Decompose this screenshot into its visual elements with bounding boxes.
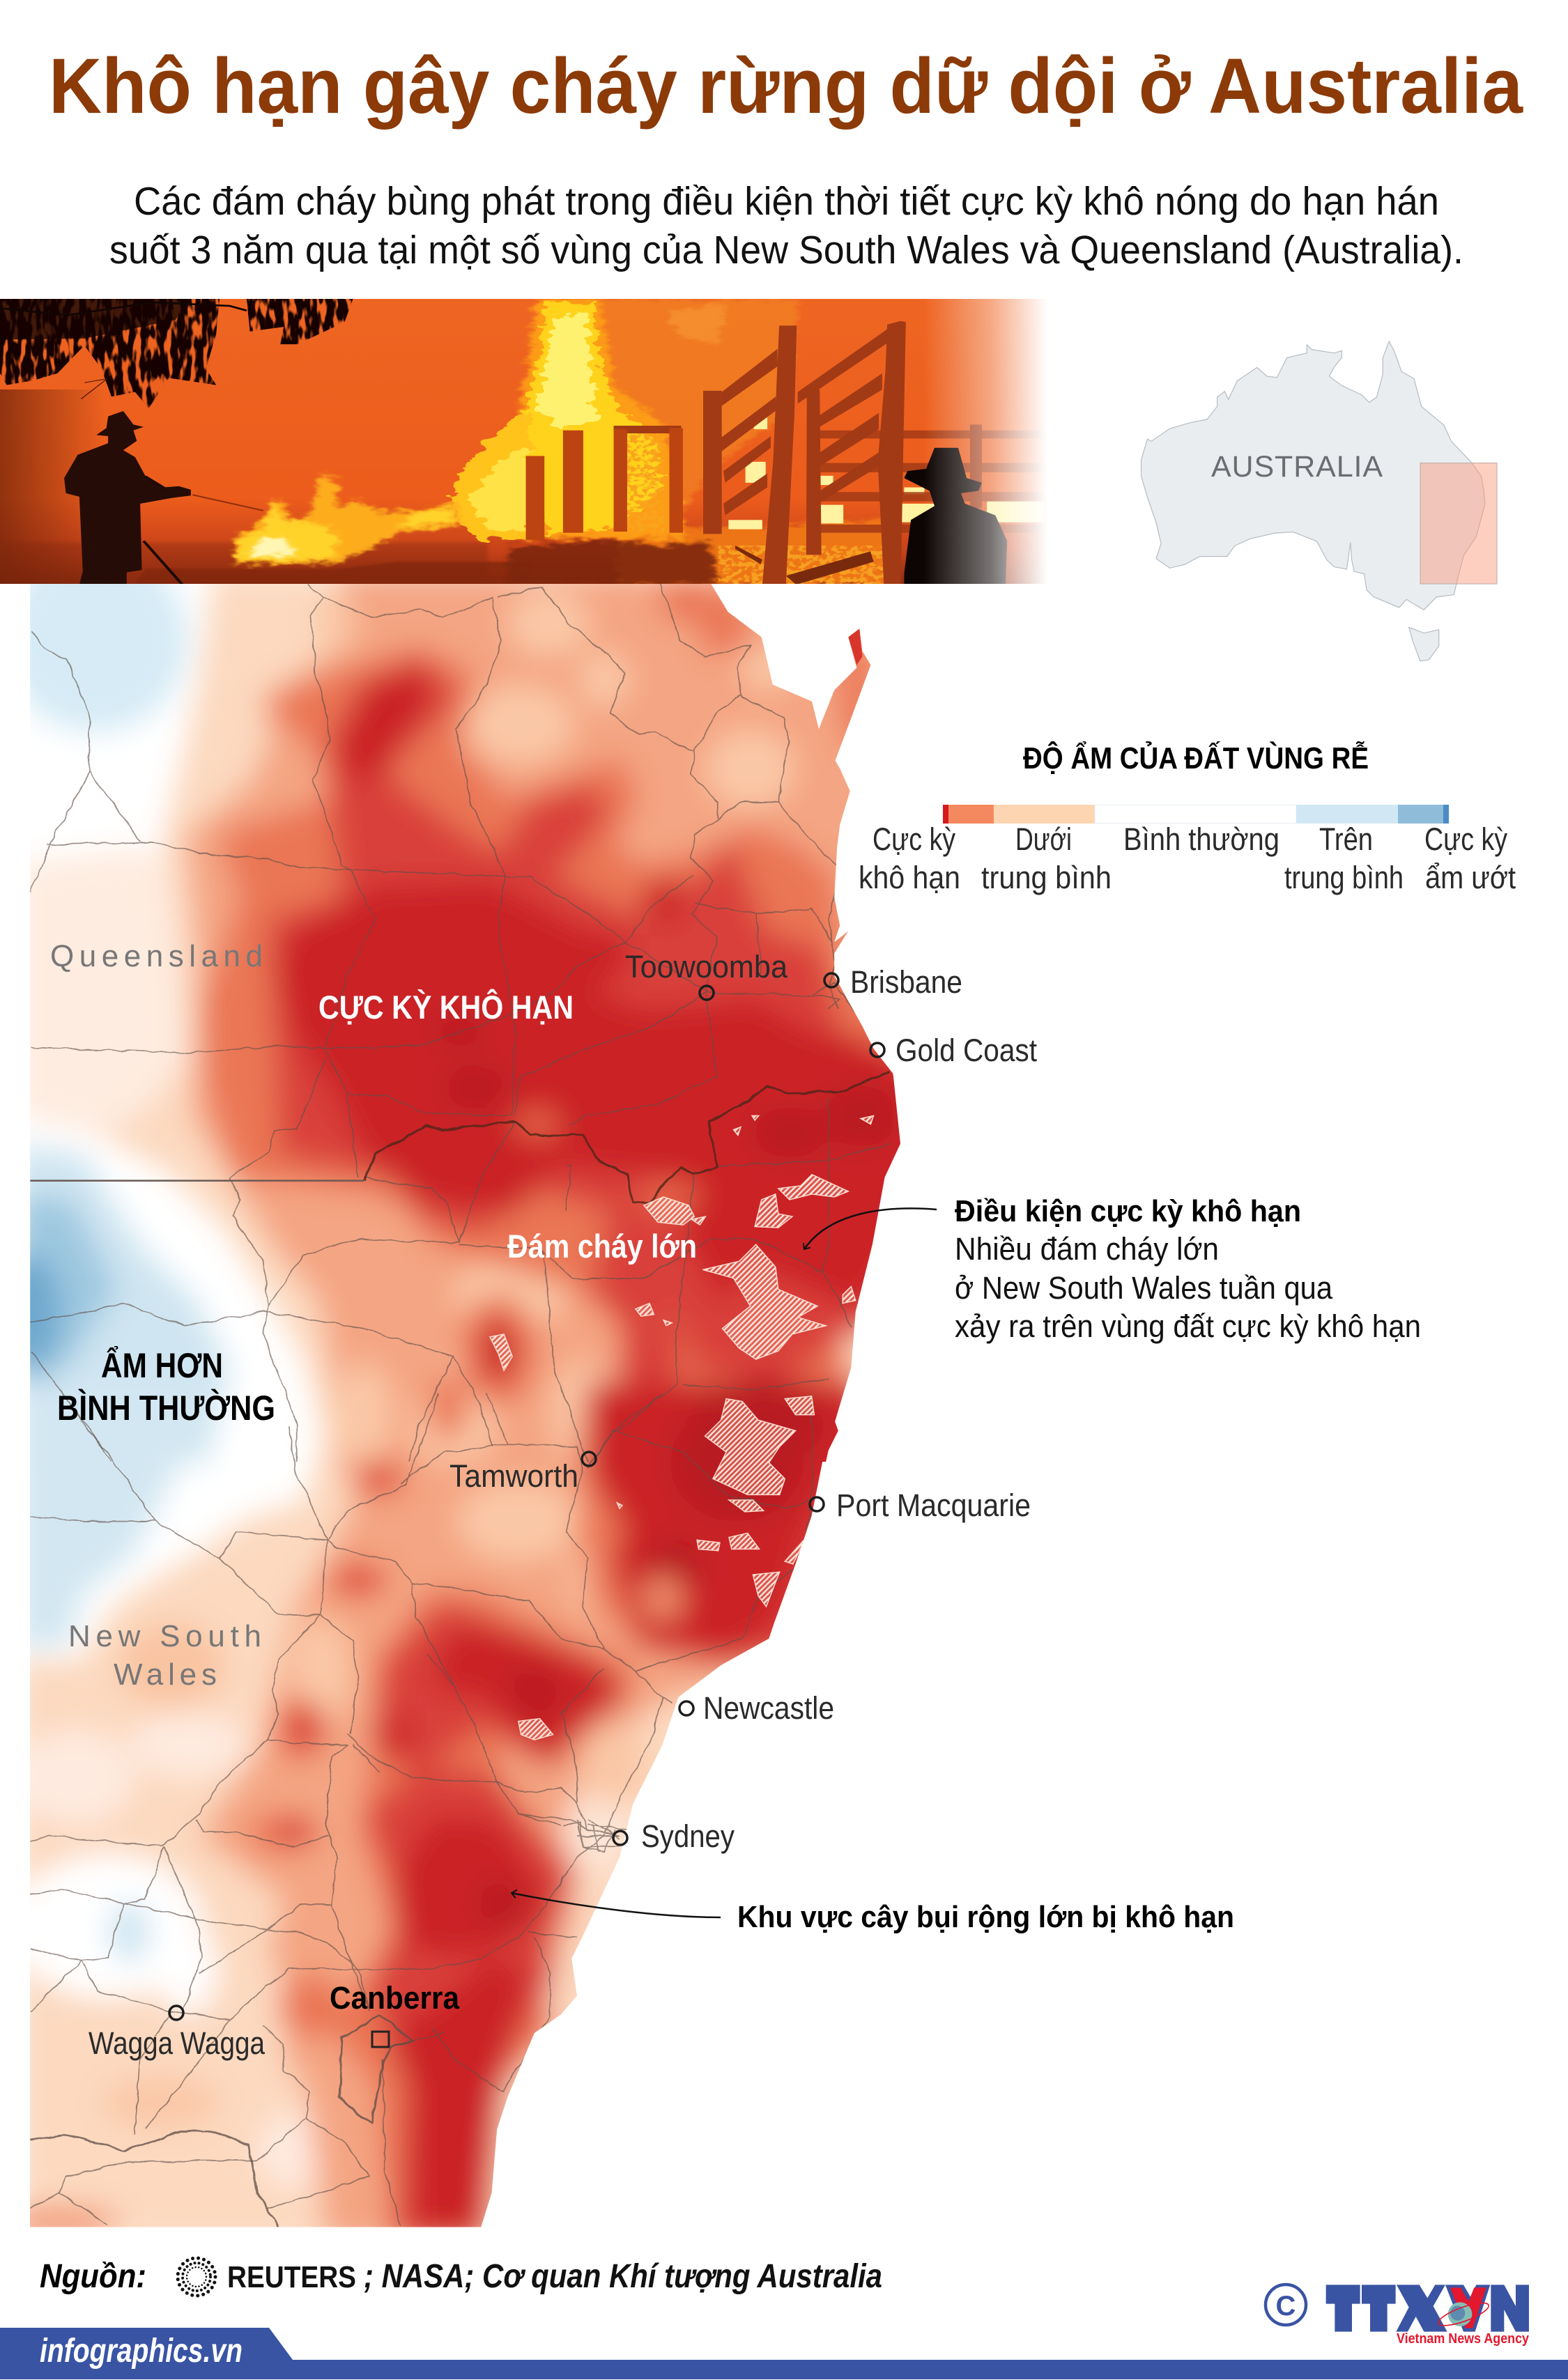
- city markers and labels: Port Macquarie: [836, 1488, 1031, 1523]
- callout: extreme dry conditions: [804, 1194, 1421, 1344]
- soil moisture map: [30, 584, 900, 2227]
- silhouette of firefighter: [0, 299, 353, 585]
- inset map: Australia locator: [1142, 341, 1497, 661]
- callout: extreme dry conditions: Nhiều đám cháy lớn: [955, 1231, 1219, 1267]
- legend: root-zone soil moisture: ẩm ướt: [1425, 860, 1516, 895]
- subtitle text block: Các đám cháy bùng phát trong điều kiện thời tiết cực kỳ khô nóng do hạn hán: [134, 179, 1439, 224]
- inset map: Australia locator: AUSTRALIA: [1211, 450, 1383, 484]
- map labels: states and regions: New South: [68, 1619, 261, 1653]
- silhouette of man in hat: [904, 448, 1007, 585]
- legend: root-zone soil moisture: Bình thường: [1123, 821, 1279, 857]
- city markers and labels: Gold Coast: [896, 1033, 1037, 1068]
- photo: bushfire with silhouettes: [0, 299, 1044, 584]
- footer bar with website tab: infographics.vn: [40, 2333, 243, 2370]
- grass foreground: [135, 562, 530, 585]
- red level: [275, 663, 924, 2236]
- map labels: states and regions: Queensland: [50, 939, 263, 973]
- source line: Nguồn:: [40, 2258, 146, 2295]
- light orange level: [185, 573, 952, 2246]
- city markers and labels: Sydney: [641, 1818, 735, 1854]
- city markers and labels: [89, 949, 1037, 2061]
- tree foliage: [0, 299, 353, 408]
- burnt areas hatch (south): [518, 1396, 814, 1740]
- map labels: states and regions: [50, 939, 697, 1692]
- logo: TTXVN Vietnam News Agency: [1266, 2285, 1530, 2347]
- city markers and labels: Newcastle: [703, 1690, 834, 1726]
- subtitle text block: [109, 179, 1463, 272]
- callout: extreme dry conditions: xảy ra trên vùng đất cực kỳ khô hạn: [955, 1308, 1421, 1344]
- low flames on the ground: [233, 410, 530, 564]
- legend: root-zone soil moisture: Cực kỳ: [1424, 821, 1507, 857]
- city markers and labels: Toowoomba: [625, 949, 788, 984]
- back fire glow and burning trees: [597, 299, 887, 585]
- city markers and labels: Wagga Wagga: [89, 2025, 266, 2061]
- map labels: states and regions: BÌNH THƯỜNG: [57, 1389, 275, 1428]
- roads and borders (south): [31, 1393, 812, 2227]
- callout: extreme dry conditions: ở New South Wales tuần qua: [955, 1270, 1333, 1306]
- map labels: states and regions: ẨM HƠN: [101, 1346, 223, 1385]
- source line: [40, 2258, 882, 2296]
- logo: TTXVN Vietnam News Agency: C: [1276, 2291, 1296, 2321]
- orange level: [201, 584, 952, 2246]
- source line: ; NASA; Cơ quan Khí tượng Australia: [364, 2258, 882, 2295]
- logo: TTXVN Vietnam News Agency: Vietnam News Agency: [1397, 2331, 1530, 2347]
- roads and borders (north): [31, 584, 891, 1462]
- red-orange level: [269, 656, 952, 2236]
- legend: root-zone soil moisture: [859, 740, 1516, 895]
- dark red accents and lighter holes: [434, 1018, 899, 1929]
- legend: root-zone soil moisture: Cực kỳ: [873, 821, 955, 857]
- peach level: [17, 573, 952, 2246]
- legend: root-zone soil moisture: ĐỘ ẨM CỦA ĐẤT VÙNG RỄ: [1023, 740, 1369, 775]
- city markers and labels: Brisbane: [850, 964, 962, 1000]
- state border: Queensland and New South Wales: [30, 1071, 891, 1203]
- legend: root-zone soil moisture: khô hạn: [859, 860, 960, 895]
- legend: root-zone soil moisture: trung bình: [1284, 860, 1404, 895]
- main flames: [509, 299, 684, 539]
- map labels: states and regions: Wales: [114, 1658, 217, 1692]
- source line: REUTERS: [227, 2260, 356, 2294]
- callout: shrubland area: [512, 1893, 1234, 1934]
- peach holes: [289, 589, 845, 1807]
- map labels: states and regions: Đám cháy lớn: [507, 1228, 697, 1265]
- footer bar with website tab: [0, 2328, 1568, 2379]
- callout: extreme dry conditions: Điều kiện cực kỳ khô hạn: [955, 1194, 1301, 1228]
- icon: Reuters logo: [178, 2258, 215, 2296]
- city markers and labels: Tamworth: [449, 1458, 578, 1494]
- fence posts and rails: [614, 321, 1046, 585]
- burnt areas hatch (north): [490, 1115, 873, 1370]
- map labels: states and regions: CỰC KỲ KHÔ HẠN: [318, 989, 574, 1026]
- legend: root-zone soil moisture: Trên: [1319, 821, 1373, 857]
- heat field: [0, 548, 952, 2246]
- callout: shrubland area: Khu vực cây bụi rộng lớn bị khô hạn: [737, 1900, 1234, 1934]
- legend: root-zone soil moisture: Dưới: [1015, 821, 1072, 857]
- subtitle text block: suốt 3 năm qua tại một số vùng của New South Wales và Queensland (Australia).: [109, 228, 1463, 272]
- city markers and labels: Canberra: [330, 1980, 460, 2016]
- legend: root-zone soil moisture: trung bình: [981, 860, 1112, 895]
